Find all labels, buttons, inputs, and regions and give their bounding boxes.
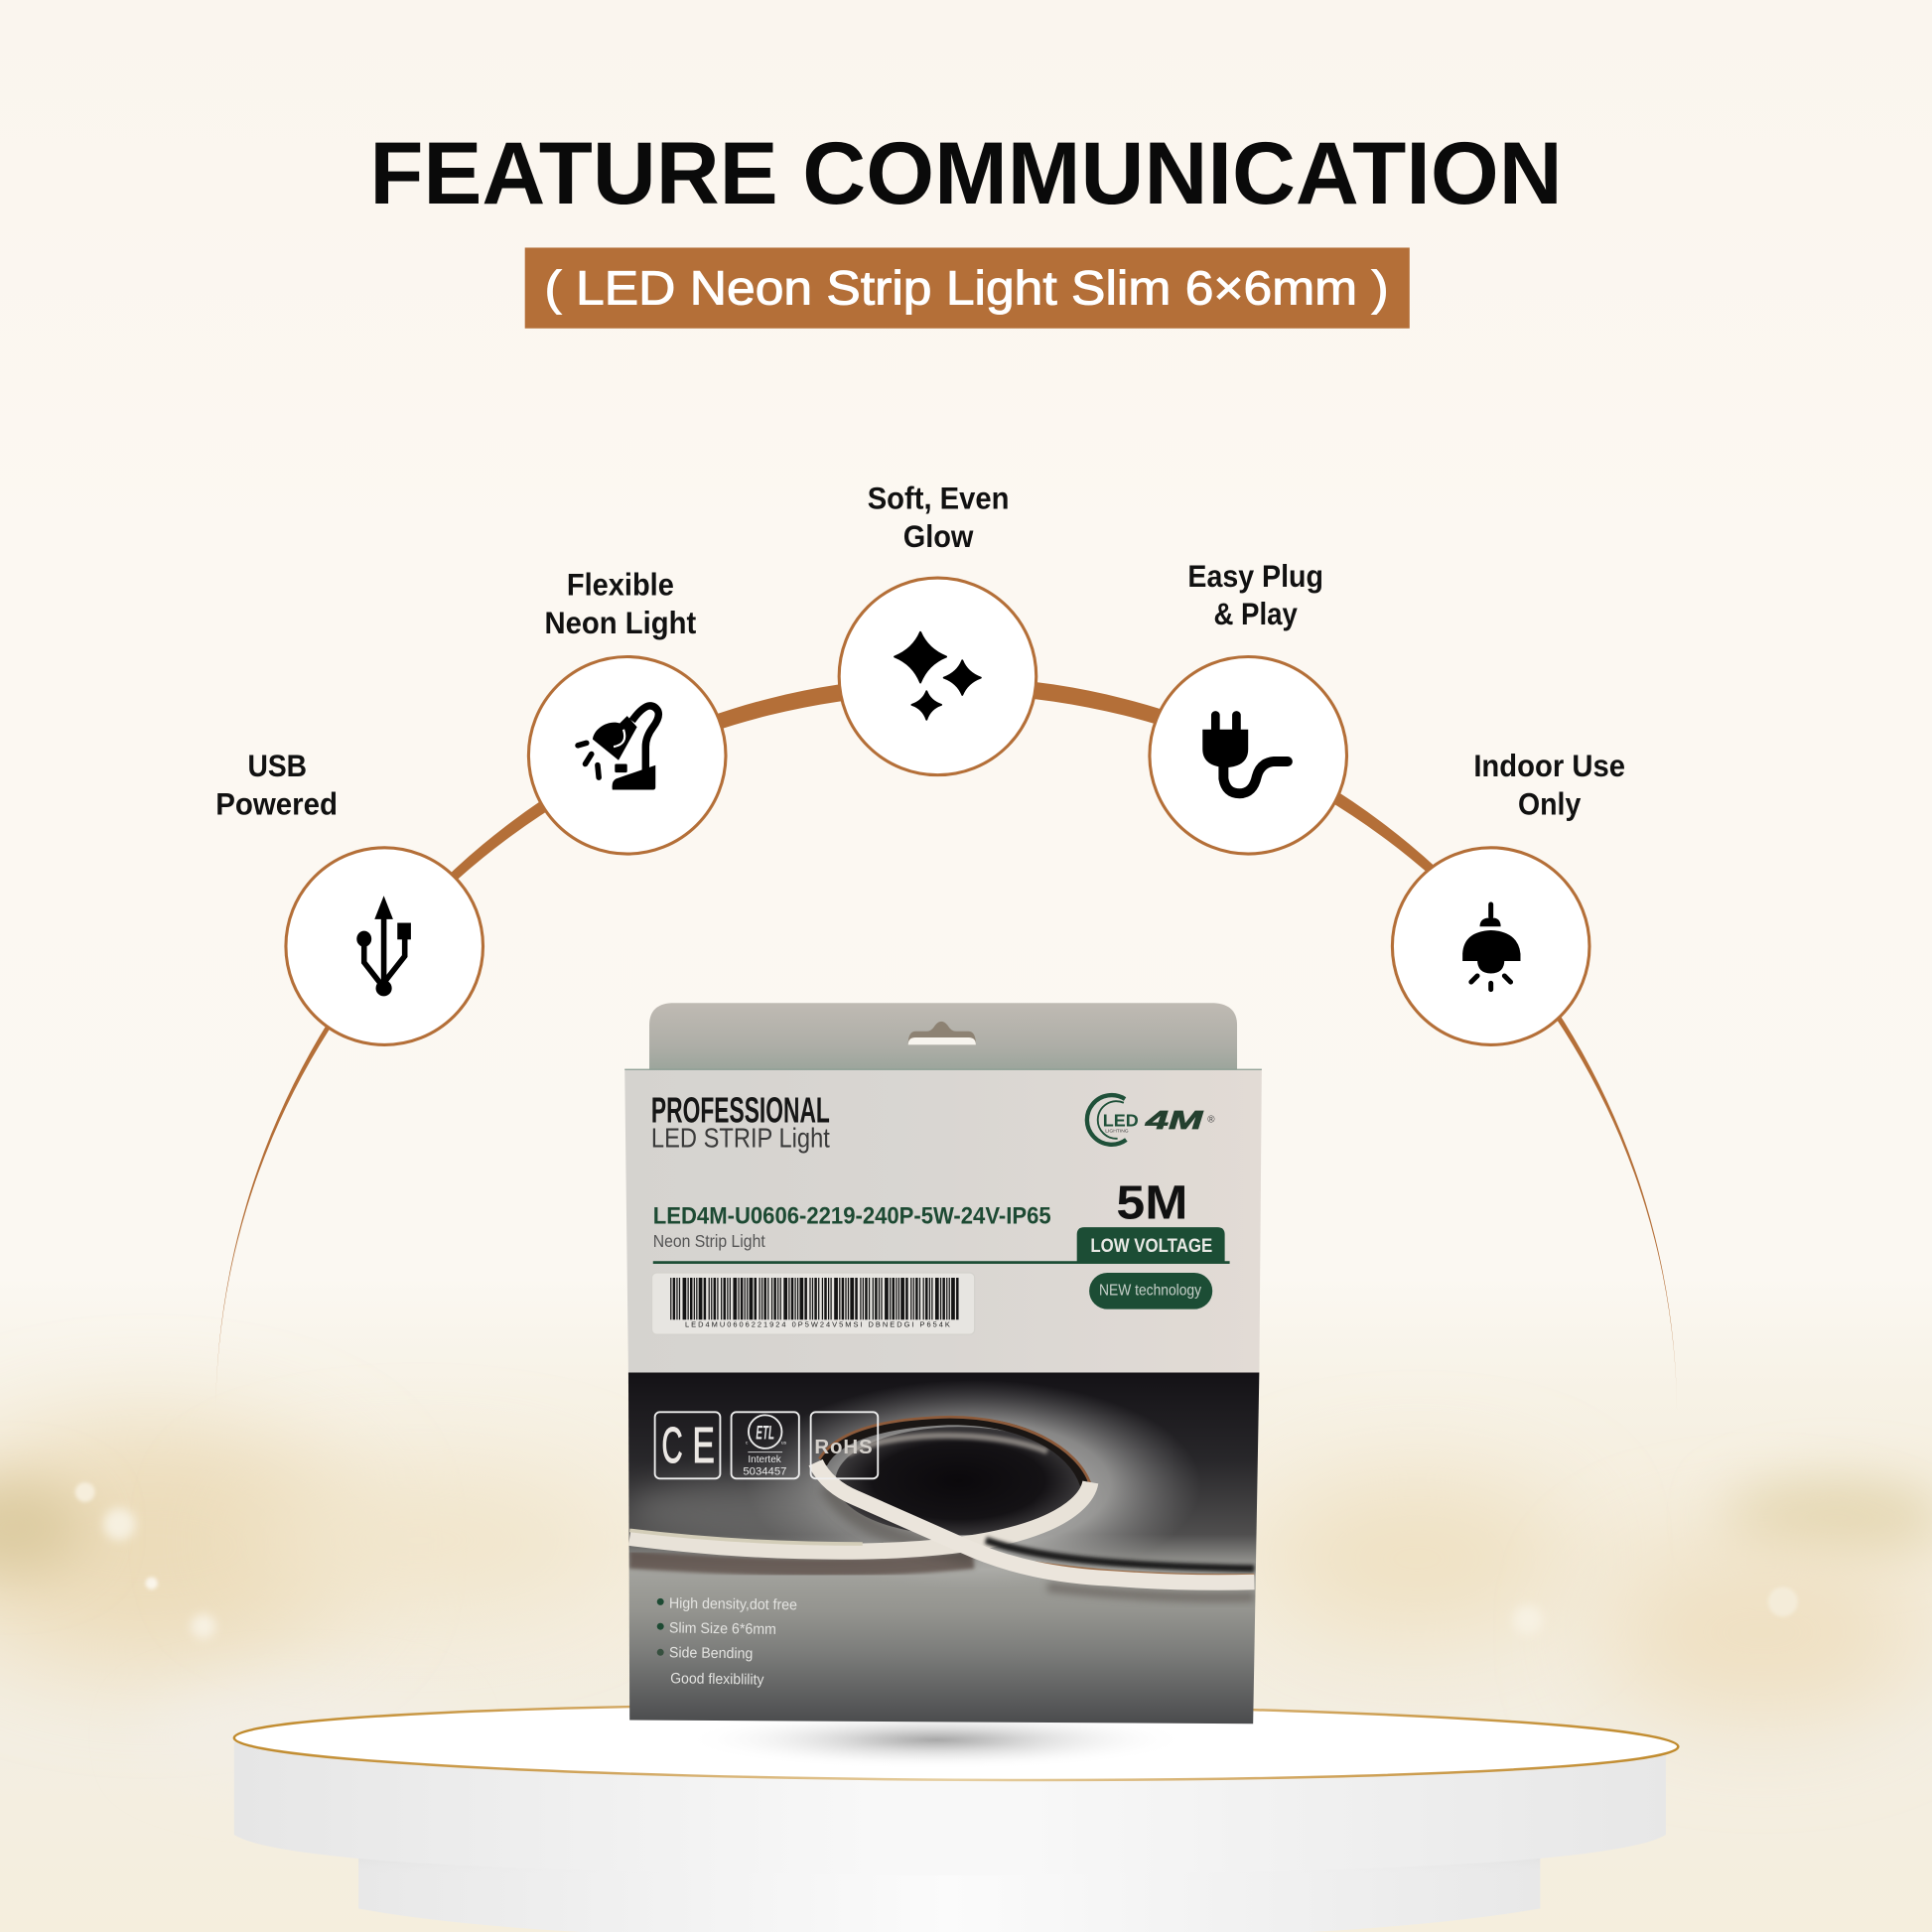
icon: sparkles — [895, 632, 981, 720]
brand logo: ® — [1207, 1115, 1215, 1126]
feature: flexible neon light — [528, 567, 726, 854]
CE mark: C — [661, 1417, 683, 1473]
label: flexible neon light: Neon Light — [545, 606, 696, 640]
label: USB powered — [215, 749, 338, 821]
inner ring highlight — [848, 1436, 1047, 1453]
icon: desk lamp — [578, 706, 658, 790]
title: FEATURE COMMUNICATION — [369, 123, 1563, 222]
feature bullets: Good flexiblility — [670, 1671, 764, 1689]
ETL mark: c — [746, 1442, 749, 1447]
label: indoor use only — [1473, 749, 1625, 821]
barcode label — [652, 1273, 975, 1334]
ETL mark: us — [781, 1442, 787, 1447]
feature: easy plug and play — [1150, 559, 1346, 854]
hanger tab — [649, 1003, 1237, 1069]
label: flexible neon light — [545, 567, 696, 640]
podium lower tier — [358, 1824, 1540, 1932]
dark wall of loop — [823, 1421, 1084, 1484]
icon: pendant lamp — [1462, 901, 1520, 990]
new technology pill: NEW technology — [1099, 1282, 1201, 1299]
barcode label: LED4MU0606221924 0P5W24V5MSI DBNEDGI P654K — [685, 1320, 950, 1329]
brand logo — [1087, 1095, 1215, 1145]
label: USB powered: Powered — [215, 786, 338, 821]
floor shadows — [629, 1560, 973, 1568]
ETL mark — [732, 1412, 799, 1478]
arc connector — [215, 676, 1677, 1417]
label: indoor use only: Indoor Use — [1473, 749, 1625, 783]
dark photo panel — [628, 1373, 1259, 1724]
subtitle banner: ( LED Neon Strip Light Slim 6×6mm ) — [545, 262, 1389, 316]
brand logo: LED — [1103, 1110, 1139, 1130]
feature: indoor use only — [1392, 749, 1625, 1044]
ETL mark: ETL — [756, 1423, 774, 1445]
subtitle banner — [525, 247, 1410, 329]
podium — [234, 1701, 1679, 1932]
feature bullets: Slim Size 6*6mm — [669, 1620, 776, 1638]
label: soft even glow: Soft, Even — [868, 482, 1009, 516]
new technology pill — [1089, 1273, 1212, 1310]
box heading — [651, 1090, 830, 1153]
front strip — [816, 1462, 1254, 1583]
label: USB powered: USB — [247, 749, 307, 783]
low voltage tab — [1077, 1227, 1225, 1262]
box heading: LED STRIP Light — [651, 1122, 830, 1153]
podium upper tier — [234, 1742, 1666, 1875]
feature bullets: High density,dot free — [669, 1596, 797, 1613]
length badge: 5M — [1116, 1175, 1187, 1229]
glow around strip — [759, 1384, 1190, 1571]
label: easy plug and play: & Play — [1213, 597, 1299, 631]
label: flexible neon light: Flexible — [567, 567, 674, 602]
label: soft even glow — [868, 482, 1009, 554]
box heading: PROFESSIONAL — [651, 1090, 830, 1131]
podium top surface — [234, 1701, 1679, 1784]
feature: USB powered — [215, 749, 483, 1044]
feature bullets: Side Bending — [669, 1645, 753, 1662]
brand logo: 4M — [1145, 1105, 1204, 1135]
product type: Neon Strip Light — [653, 1231, 765, 1251]
CE mark: E — [692, 1417, 715, 1473]
loop edge — [819, 1417, 1090, 1484]
feature: soft even glow — [839, 482, 1036, 775]
low voltage tab: LOW VOLTAGE — [1090, 1235, 1212, 1257]
left strip and loop return — [629, 1482, 1090, 1552]
box front panel — [624, 1069, 1262, 1374]
certification marks — [655, 1412, 878, 1478]
RoHS mark: RoHS — [814, 1436, 873, 1458]
product box — [624, 1003, 1262, 1724]
ETL mark: 5034457 — [743, 1466, 786, 1478]
model number: LED4M-U0606-2219-240P-5W-24V-IP65 — [653, 1202, 1051, 1228]
CE mark — [655, 1412, 720, 1478]
label: soft even glow: Glow — [903, 519, 974, 554]
dark wall of front strip — [986, 1540, 1254, 1569]
label: indoor use only: Only — [1518, 786, 1582, 821]
icon: USB — [356, 896, 411, 996]
icon: plug — [1202, 711, 1288, 793]
label: easy plug and play — [1187, 559, 1323, 631]
dark loop interior — [835, 1427, 1082, 1535]
RoHS mark — [811, 1412, 878, 1478]
box shadow — [684, 1711, 1189, 1769]
brand logo: LIGHTING — [1105, 1129, 1129, 1135]
feature bullets — [657, 1596, 797, 1689]
label: easy plug and play: Easy Plug — [1187, 559, 1323, 594]
ETL mark: Intertek — [748, 1453, 782, 1465]
